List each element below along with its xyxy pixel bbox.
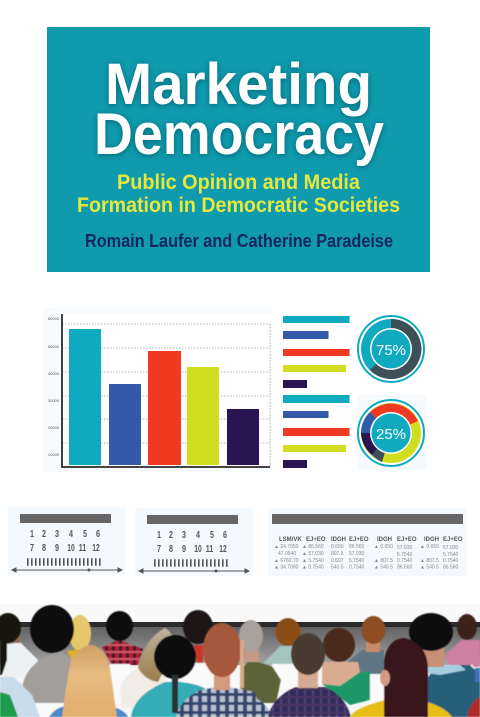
- panel: number scale middle: 6: [223, 530, 227, 541]
- table headers: [279, 537, 463, 543]
- panel: number scale left: 10: [67, 543, 75, 554]
- bar chart: [43, 308, 271, 472]
- audience: [0, 605, 480, 717]
- table values: ▲ 24.7050: [274, 544, 299, 550]
- table values: ▲ 540.5: [374, 564, 393, 570]
- panel: number scale left: 1: [30, 529, 34, 540]
- panel: number scale left: 11: [79, 543, 87, 554]
- panel: number scale left: 2: [42, 529, 46, 540]
- panel: number scale middle: 10: [194, 544, 202, 555]
- table values: 540.5: [331, 564, 344, 570]
- subtitle: Public Opinion and Media: [117, 170, 361, 194]
- panel: number scale middle: [135, 508, 253, 576]
- panel: number scale left: 6: [96, 529, 100, 540]
- panel: number scale left: 5: [83, 529, 87, 540]
- table values: 5.7540: [443, 552, 459, 558]
- panel: number scale middle: 7: [157, 544, 161, 555]
- panel: number scale middle: 8: [169, 544, 173, 555]
- table values: ▲ 5.7540: [302, 558, 324, 564]
- title: Marketing: [105, 52, 372, 117]
- table headers: IDGH: [331, 537, 346, 543]
- table values: 86.560: [443, 564, 459, 570]
- table values: ▲ 0.650: [374, 544, 393, 550]
- table values: [274, 544, 459, 570]
- table values: ▲ 34.7080: [274, 564, 299, 570]
- table values: 0.7540: [443, 558, 459, 564]
- title shadow: [94, 53, 384, 168]
- panel: number scale left: 7: [30, 543, 34, 554]
- panel: number scale middle: 4: [196, 530, 200, 541]
- axis labels: 20000: [48, 425, 60, 430]
- table headers: IDGH: [424, 537, 439, 543]
- table values: 5.7540: [397, 552, 413, 558]
- axis labels: 50000: [48, 344, 60, 349]
- axis labels: 10000: [48, 452, 60, 457]
- middle row people: [22, 605, 480, 717]
- table values: ▲ 807.5: [374, 558, 393, 564]
- subtitle: [77, 170, 400, 217]
- authors: Romain Laufer and Catherine Paradeise: [85, 231, 393, 251]
- table headers: LSM/VK: [279, 537, 302, 543]
- panel: number scale left: 9: [55, 543, 59, 554]
- table headers: EJ+EO: [397, 537, 417, 543]
- table values: 57.030: [443, 545, 459, 551]
- table values: 47.0540: [278, 551, 296, 557]
- axis labels: [48, 316, 60, 457]
- panel: number scale middle: 11: [206, 544, 214, 555]
- panel: title block: [47, 27, 430, 272]
- table values: 57.030: [397, 545, 413, 551]
- panel: number scale middle: 3: [182, 530, 186, 541]
- horizontal bars: [283, 316, 350, 468]
- axis labels: 40000: [48, 371, 60, 376]
- table values: 0.7540: [397, 558, 413, 564]
- table values: ▲ 807.5: [420, 558, 439, 564]
- table values: ▲ 0.650: [420, 544, 439, 550]
- table headers: EJ+EO: [349, 537, 369, 543]
- panel: number scale left: 4: [69, 529, 73, 540]
- front row people: [0, 623, 480, 717]
- title shadow: Democracy: [94, 103, 384, 168]
- panel: number scale middle: 12: [219, 544, 227, 555]
- panel: number scale left: 12: [92, 543, 100, 554]
- axis labels: 30000: [48, 398, 60, 403]
- donut: 25%: 25%: [376, 426, 406, 443]
- table values: ▲ 86.560: [302, 544, 324, 550]
- panel: data table: [268, 508, 467, 576]
- panel: number scale middle: 9: [182, 544, 186, 555]
- table values: ▲ 57.030: [302, 551, 324, 557]
- panel: number scale middle: 2: [169, 530, 173, 541]
- panel: number scale left: [8, 507, 125, 575]
- title: [94, 52, 384, 167]
- table values: 0.650: [331, 544, 344, 550]
- table headers: EJ+EO: [306, 537, 326, 543]
- donut: 75%: 75%: [376, 342, 406, 359]
- table values: 807.5: [331, 551, 344, 557]
- back row people: [0, 610, 480, 678]
- donut: 75%: [358, 316, 424, 382]
- subtitle: Formation in Democratic Societies: [77, 193, 400, 217]
- table values: 0.607: [331, 558, 344, 564]
- panel: number scale left: 3: [55, 529, 59, 540]
- table values: ▲ 540.5: [420, 564, 439, 570]
- panel: number scale left: 8: [42, 543, 46, 554]
- table values: 0.7540: [349, 564, 365, 570]
- seat backs: [35, 663, 473, 717]
- title: Democracy: [94, 102, 384, 167]
- panel: number scale middle: 1: [157, 530, 161, 541]
- table values: 86.560: [397, 564, 413, 570]
- wall and screen: [0, 604, 480, 717]
- table values: 57.030: [349, 551, 365, 557]
- bars: [69, 329, 259, 465]
- title shadow: Marketing: [105, 53, 372, 118]
- donut: 25%: [358, 395, 427, 470]
- table headers: EJ+EO: [443, 537, 463, 543]
- table values: 5.7540: [349, 558, 365, 564]
- table headers: IDGH: [377, 537, 392, 543]
- panel: number scale middle: 5: [210, 530, 214, 541]
- axis labels: 60000: [48, 316, 60, 321]
- table values: 86.560: [349, 544, 365, 550]
- table values: ▲ 0.7540: [302, 564, 324, 570]
- table values: ▲ 6760.70: [274, 558, 299, 564]
